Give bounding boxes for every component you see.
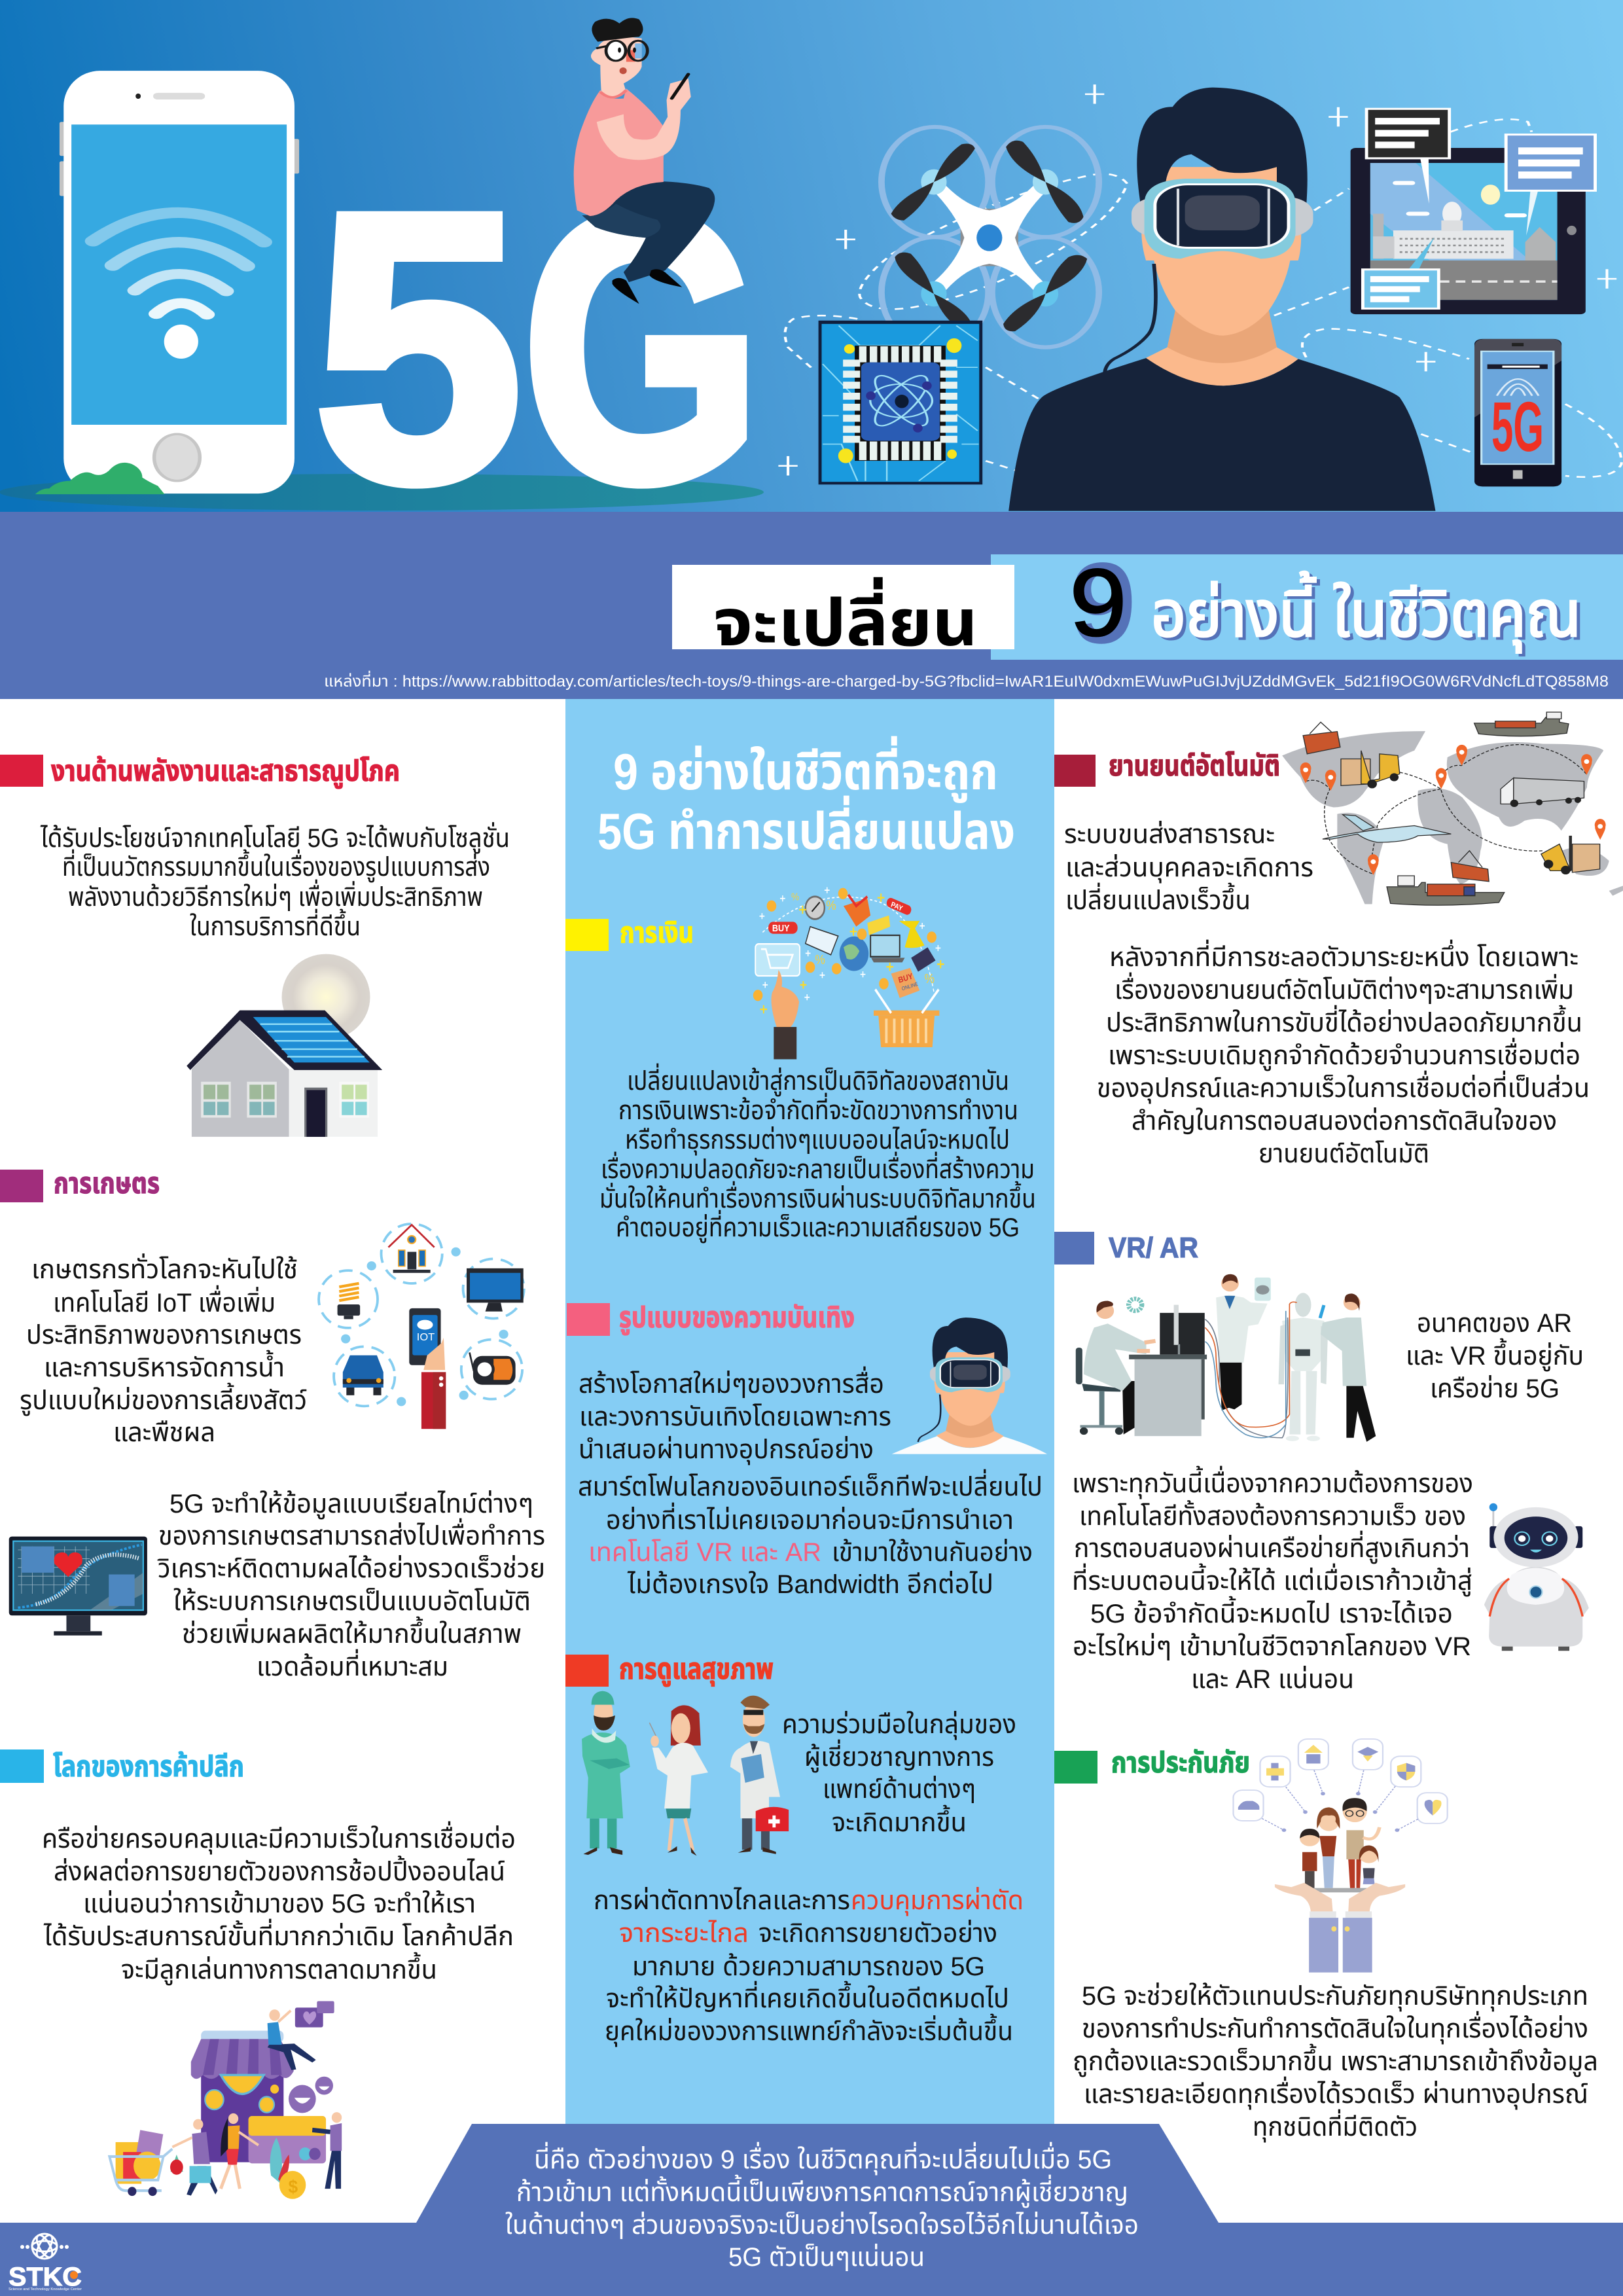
- text: entertainment body: สมาร์ตโฟนโลกของอินเทอร์แอ็กทีฟจะเปลี่ยนไป: [578, 1469, 1043, 1501]
- text: agriculture data: แวดล้อมที่เหมาะสม: [257, 1649, 448, 1681]
- text: entertainment body: เข้ามาใช้งานกันอย่าง: [832, 1538, 1033, 1567]
- logo: STKC: [9, 2233, 82, 2291]
- icon: VR man small: [892, 1318, 1047, 1454]
- panel: energy and utilities: [0, 755, 510, 1137]
- panel: agriculture: [0, 1168, 545, 1681]
- text: healthcare surgery: [594, 1886, 1024, 2047]
- text: retail body: แน่นอนว่าการเข้ามาของ 5G จะทำให้เรา: [83, 1890, 476, 1918]
- text: healthcare surgery: จากระยะไกล: [619, 1919, 749, 1948]
- heading: retail: โลกของการค้าปลีก: [53, 1751, 244, 1783]
- text: entertainment body: [578, 1366, 1043, 1599]
- text: automotive intro: [1064, 820, 1313, 915]
- center heading: [597, 736, 1015, 860]
- text: healthcare surgery: ควบคุมการผ่าตัด: [851, 1886, 1024, 1916]
- cart: [116, 2142, 141, 2184]
- 5G big title: 5: [314, 135, 522, 560]
- text: energy body: พลังงานด้วยวิธีการใหม่ๆ เพื่อเพิ่มประสิทธิภาพ: [68, 879, 483, 912]
- text: retail body: ได้รับประสบการณ์ขั้นที่มากกว่าเดิม โลกค้าปลีก: [43, 1918, 514, 1951]
- logo: STKC: STKC: [9, 2263, 82, 2291]
- icon: online shopping: %: [925, 972, 935, 986]
- text: finance body: [599, 1063, 1036, 1243]
- text: VR AR body: ที่ระบบตอนนี้จะให้ได้ แต่เมื่อเราก้าวเข้าสู่: [1072, 1563, 1472, 1596]
- heading: VR AR: VR/ AR: [1109, 1232, 1198, 1264]
- text: healthcare collaboration: [782, 1710, 1016, 1837]
- text: energy body: [40, 821, 510, 941]
- text: automotive body: เพราะระบบเดิมถูกจำกัดด้วยจำนวนการเชื่อมต่อ: [1108, 1037, 1580, 1071]
- text: automotive body: [1097, 939, 1590, 1168]
- text: agriculture data: วิเคราะห์ติดตามผลได้อย่างรวดเร็วช่วย: [157, 1554, 545, 1583]
- text: agriculture intro: และพืชผล: [113, 1418, 215, 1447]
- text: agriculture data: ให้ระบบการเกษตรเป็นแบบอัตโนมัติ: [173, 1587, 531, 1616]
- text: automotive body: หลังจากที่มีการชะลอตัวมาระยะหนึ่ง โดยเฉพาะ: [1109, 939, 1578, 972]
- text: healthcare collaboration: จะเกิดมากขึ้น: [832, 1804, 967, 1837]
- text: entertainment body: อย่างที่เราไม่เคยเจอมาก่อนจะมีการนำเอา: [606, 1502, 1014, 1535]
- people: [187, 2043, 341, 2196]
- icon: world logistics map: [1282, 712, 1623, 905]
- center heading: 5G ทำการเปลี่ยนแปลง: [597, 796, 1015, 860]
- text: automotive intro: ระบบขนส่งสาธารณะ: [1064, 820, 1275, 849]
- icon: scientists and android: [1076, 1274, 1376, 1442]
- icon: medical staff: [582, 1691, 789, 1856]
- text: automotive body: สำคัญในการตอบสนองต่อการตัดสินใจของ: [1132, 1107, 1557, 1136]
- text: entertainment body: สร้างโอกาสใหม่ๆของวงการสื่อ: [579, 1366, 884, 1399]
- source line: แหล่งที่มา : https://www.rabbittoday.com/articles/tech-toys/9-things-are-charged-by-5G?fbclid=IwAR1EuIW0dxmEWuwPuGIJvjUZddMGvEk_5d21fI9OG0W6RVdNcfLdTQ858M8: [324, 670, 1609, 691]
- plus signs: [778, 84, 1616, 476]
- text: automotive intro: และส่วนบุคคลจะเกิดการ: [1065, 853, 1313, 883]
- icon: online shopping: %: [815, 953, 825, 968]
- heading: nine things in your life: 9: [1071, 539, 1136, 668]
- heading: nine things in your life: อย่างนี้ ในชีวิตคุณ: [1154, 574, 1584, 656]
- text: energy body: ได้รับประโยชน์จากเทคโนโลยี 5G จะได้พบกับโซลูชั่น: [40, 821, 510, 853]
- icon: online shopping: BUY: [772, 922, 789, 933]
- heading: agriculture: การเกษตร: [54, 1168, 160, 1200]
- panel: finance: [565, 888, 1036, 1243]
- text: agriculture intro: เกษตรกรทั่วโลกจะหันไปใช้: [31, 1253, 298, 1284]
- text: automotive body: ยานยนต์อัตโนมัติ: [1258, 1139, 1429, 1168]
- text: VR AR body: 5G ข้อจำกัดนี้จะหมดไป เราจะได้เจอ: [1090, 1596, 1453, 1628]
- text: energy body: ในการบริการที่ดีขึ้น: [190, 908, 361, 941]
- icon: tablet with city: [1351, 109, 1596, 314]
- text: entertainment body: ไม่ต้องเกรงใจ Bandwidth อีกต่อไป: [627, 1570, 993, 1599]
- icon: online shopping: PAY: [890, 901, 904, 913]
- icon: drone: [882, 127, 1099, 348]
- text: agriculture intro: [20, 1253, 307, 1447]
- icon: online shop: [109, 2001, 342, 2199]
- text: VR AR body: [1072, 1465, 1473, 1694]
- icon: online shopping: BUY: [897, 972, 914, 985]
- text: footer summary: [505, 2142, 1139, 2272]
- text: VR AR future: อนาคตของ AR: [1417, 1309, 1572, 1338]
- text: finance body: เรื่องความปลอดภัยจะกลายเป็นเรื่องที่สร้างความ: [601, 1151, 1035, 1184]
- text: VR AR body: อะไรใหม่ๆ เข้ามาในชีวิตจากโลกของ VR: [1073, 1632, 1471, 1661]
- panel: title band: [0, 512, 1623, 699]
- text: agriculture data: ของการเกษตรสามารถส่งไปเพื่อทำการ: [158, 1518, 545, 1551]
- icon: online shopping: ONLINE: [901, 980, 918, 992]
- text: energy body: ที่เป็นนวัตกรรมมากขึ้นในเรื่องของรูปแบบการส่ง: [62, 849, 490, 882]
- text: VR AR body: เทคโนโลยีทั้งสองต้องการความเร็ว ของ: [1079, 1499, 1466, 1531]
- icon: VR man: [1008, 88, 1435, 511]
- text: footer summary: 5G ตัวเป็นๆแน่นอน: [728, 2243, 925, 2272]
- text: agriculture data: [157, 1490, 545, 1681]
- text: VR AR body: เพราะทุกวันนี้เนื่องจากความต้องการของ: [1072, 1465, 1473, 1499]
- text: insurance body: ถูกต้องและรวดเร็วมากขึ้น เพราะสามารถเข้าถึงข้อมูล: [1073, 2043, 1598, 2077]
- 5G big title: G: [522, 135, 761, 560]
- 5G big title: [314, 135, 761, 560]
- icon: family and insurance: [1234, 1739, 1448, 1973]
- heading: energy: งานด้านพลังงานและสาธารณูปโภค: [51, 755, 400, 789]
- text: insurance body: และรายละเอียดทุกเรื่องได้รวดเร็ว ผ่านทางอุปกรณ์: [1084, 2076, 1588, 2109]
- icon: chip: [819, 321, 982, 484]
- text: healthcare surgery: มากมาย ด้วยความสามารถของ 5G: [632, 1952, 985, 1981]
- text: footer summary: ในด้านต่างๆ ส่วนของจริงจะเป็นอย่างไรอดใจรอไว้อีกไม่นานได้เจอ: [505, 2211, 1139, 2240]
- text: entertainment body: เทคโนโลยี VR และ AR: [588, 1538, 821, 1567]
- icon: solar house: [187, 954, 382, 1137]
- text: finance body: มั่นใจให้คนทำเรื่องการเงินผ่านระบบดิจิทัลมากขึ้น: [599, 1181, 1036, 1213]
- text: healthcare surgery: จะทำให้ปัญหาที่เคยเกิดขึ้นในอดีตหมดไป: [606, 1981, 1009, 2013]
- icon: online shopping: %: [826, 899, 836, 913]
- text: automotive body: ของอุปกรณ์และความเร็วในการเชื่อมต่อที่เป็นส่วน: [1097, 1070, 1590, 1103]
- text: insurance body: [1073, 1982, 1598, 2142]
- panel: center column: [565, 699, 1054, 2126]
- icon: IoT network: IOT: [417, 1331, 435, 1343]
- text: agriculture data: ช่วยเพิ่มผลผลิตให้มากขึ้นในสภาพ: [182, 1616, 522, 1649]
- panel: automotive: [1054, 712, 1623, 1168]
- heading: healthcare: การดูแลสุขภาพ: [619, 1653, 774, 1687]
- heading: insurance: การประกันภัย: [1111, 1747, 1250, 1779]
- text: healthcare collaboration: ความร่วมมือในกลุ่มของ: [782, 1710, 1016, 1740]
- icon: online shopping: %: [791, 892, 799, 903]
- panel: retail: [0, 1749, 516, 2199]
- text: agriculture intro: เทคโนโลยี IoT เพื่อเพิ่ม: [53, 1285, 276, 1318]
- text: automotive body: ประสิทธิภาพในการขับขี่ได้อย่างปลอดภัยมากขึ้น: [1106, 1005, 1582, 1037]
- text: finance body: การเงินเพราะข้อจำกัดที่จะขัดขวางการทำงาน: [618, 1092, 1018, 1125]
- heading: nine things in your life: อย่างนี้ ในชีวิตคุณ: [1151, 571, 1581, 653]
- text: insurance body: ทุกชนิดที่มีติดตัว: [1253, 2109, 1418, 2142]
- heading: automotive: ยานยนต์อัตโนมัติ: [1109, 750, 1280, 782]
- text: healthcare surgery: การผ่าตัดทางไกลและการ: [594, 1886, 850, 1915]
- panel: footer: [0, 2124, 1623, 2296]
- text: retail body: ส่งผลต่อการขยายตัวของการช้อปปิ้งออนไลน์: [54, 1855, 505, 1886]
- text: VR AR body: การตอบสนองผ่านเครือข่ายที่สูงเกินกว่า: [1074, 1530, 1470, 1564]
- text: footer summary: ก้าวเข้ามา แต่ทั้งหมดนี้เป็นเพียงการคาดการณ์จากผู้เชี่ยวชาญ: [516, 2174, 1128, 2208]
- text: healthcare surgery: ยุคใหม่ของวงการแพทย์กำลังจะเริ่มต้นขึ้น: [605, 2013, 1013, 2047]
- icon: online shop: $: [288, 2176, 298, 2197]
- logo: STKC: Science and Technology Knowledge Center: [9, 2287, 82, 2291]
- text: finance body: เปลี่ยนแปลงเข้าสู่การเป็นดิจิทัลของสถาบัน: [627, 1063, 1009, 1096]
- panel: entertainment: [567, 1302, 1047, 1599]
- text: footer summary: นี่คือ ตัวอย่างของ 9 เรื่อง ในชีวิตคุณที่จะเปลี่ยนไปเมื่อ 5G: [534, 2142, 1112, 2175]
- text: entertainment body: และวงการบันเทิงโดยเฉพาะการ: [579, 1403, 891, 1431]
- heading: nine things in your life: 9: [1069, 549, 1127, 656]
- text: agriculture data: 5G จะทำให้ข้อมูลแบบเรียลไทม์ต่างๆ: [169, 1490, 533, 1519]
- text: healthcare surgery: จะเกิดการขยายตัวอย่าง: [758, 1919, 997, 1948]
- text: VR AR future: และ VR ขึ้นอยู่กับ: [1406, 1338, 1584, 1371]
- text: entertainment body: นำเสนอผ่านทางอุปกรณ์อย่าง: [579, 1435, 874, 1465]
- text: finance body: คำตอบอยู่ที่ความเร็วและความเสถียรของ 5G: [616, 1210, 1020, 1243]
- text: VR AR future: เครือข่าย 5G: [1430, 1374, 1560, 1403]
- icon: smartphone with wifi: [35, 71, 299, 494]
- text: healthcare collaboration: ผู้เชี่ยวชาญทางการ: [804, 1739, 994, 1772]
- ground shadow: [0, 474, 764, 511]
- 5G label on small phone: 5G: [1491, 387, 1544, 466]
- text: automotive intro: เปลี่ยนแปลงเร็วขึ้น: [1065, 882, 1251, 915]
- icon: 5G smartphone: [1474, 339, 1561, 486]
- decorative tech illustrations: [778, 84, 1622, 511]
- panel: healthcare: [565, 1653, 1024, 2047]
- text: retail body: [42, 1821, 516, 1985]
- icon: IoT network: [319, 1224, 524, 1429]
- text: agriculture intro: ประสิทธิภาพของการเกษตร: [26, 1321, 302, 1350]
- text: VR AR body: และ AR แน่นอน: [1191, 1665, 1354, 1694]
- heading: finance: การเงิน: [620, 917, 694, 949]
- text: agriculture intro: รูปแบบใหม่ของการเลี้ยงสัตว์: [20, 1382, 307, 1416]
- panel: VR and AR: [1054, 1232, 1589, 1694]
- text: healthcare collaboration: แพทย์ด้านต่างๆ: [823, 1775, 976, 1804]
- text: finance body: หรือทำธุรกรรมต่างๆแบบออนไลน์จะหมดไป: [625, 1126, 1010, 1155]
- text: insurance body: 5G จะช่วยให้ตัวแทนประกันภัยทุกบริษัททุกประเภท: [1082, 1982, 1588, 2011]
- text: retail body: ครือข่ายครอบคลุมและมีความเร็วในการเชื่อมต่อ: [42, 1821, 516, 1854]
- dashed connections: [785, 119, 1622, 477]
- icon: monitor with data: [9, 1537, 147, 1636]
- text: automotive body: เรื่องของยานยนต์อัตโนมัติต่างๆจะสามารถเพิ่ม: [1115, 972, 1574, 1005]
- text: insurance body: ของการทำประกันทำการตัดสินใจในทุกเรื่องได้อย่าง: [1082, 2011, 1588, 2044]
- center heading: 9 อย่างในชีวิตที่จะถูก: [613, 736, 998, 803]
- panel: hero banner: [0, 0, 1623, 560]
- heading: entertainment: รูปแบบของความบันเทิง: [619, 1302, 855, 1335]
- icon: online shopping: [753, 888, 944, 1059]
- icon: robot: [1484, 1503, 1589, 1651]
- text: VR AR future: [1406, 1309, 1584, 1403]
- text: retail body: จะมีลูกเล่นทางการตลาดมากขึ้น: [121, 1952, 437, 1985]
- panel: insurance: [1054, 1739, 1598, 2142]
- heading: will change: จะเปลี่ยน: [713, 577, 978, 660]
- heading: nine things in your life: [1069, 539, 1584, 668]
- text: agriculture intro: และการบริหารจัดการน้ำ: [44, 1350, 285, 1382]
- icon: man with phone sitting on 5G: [574, 18, 715, 304]
